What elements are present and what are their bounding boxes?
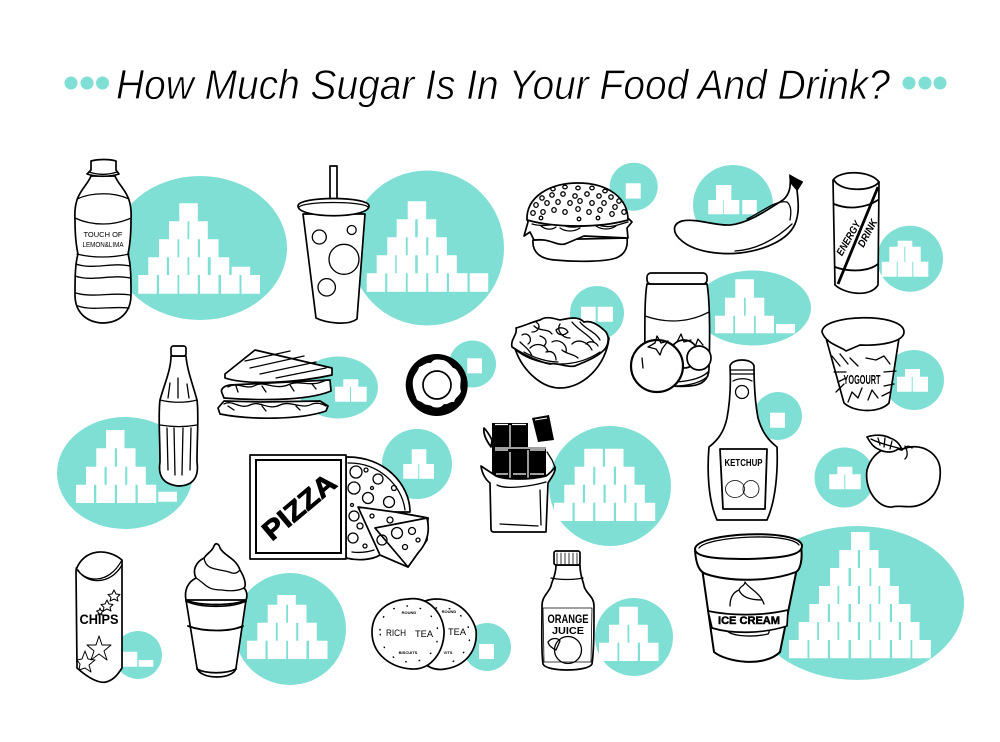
icon: banana — [674, 174, 803, 254]
icon: sandwich — [218, 350, 332, 418]
item: fizzy drink — [298, 166, 504, 326]
icon: apple — [867, 435, 940, 507]
tomatoes — [670, 340, 698, 368]
bottle label text: KETCHUP — [724, 457, 762, 469]
teal ellipse — [750, 526, 964, 680]
teal ellipse — [298, 356, 378, 418]
sugar cube — [479, 644, 494, 659]
teal circle — [693, 165, 773, 245]
sesame seeds — [531, 185, 626, 221]
item: energy drink — [833, 173, 943, 293]
sugar cubes: sundae — [247, 595, 328, 659]
bottle label: TOUCH OF — [83, 230, 123, 239]
icon: burger — [524, 183, 632, 261]
sugar cubes: jar — [715, 279, 795, 333]
pizza box — [250, 455, 346, 559]
icon: water bottle — [75, 160, 131, 323]
icon: sundae cup — [185, 544, 247, 677]
teal ellipse — [549, 426, 671, 546]
item: salad — [512, 286, 624, 388]
icon: pizza and box — [250, 455, 428, 567]
item: cola bottle — [57, 346, 198, 529]
icon: pizza and box: PIZZA — [256, 467, 342, 546]
icon: biscuits — [372, 599, 476, 670]
title: How Much Sugar Is In Your Food And Drink? — [116, 61, 891, 108]
icon: energy drink can — [833, 173, 881, 293]
tub text: ICE CREAM — [718, 615, 780, 627]
item: doughnut — [406, 340, 496, 416]
teal circle — [610, 163, 658, 211]
icon: energy drink can: DRINK — [856, 216, 881, 249]
teal circle — [595, 598, 673, 676]
item: ice cream tub — [695, 526, 964, 680]
icon: biscuits: TEA — [415, 629, 433, 639]
item: chips — [76, 552, 162, 682]
icon: fizzy drink cup — [298, 166, 369, 323]
item: orange juice — [542, 551, 673, 676]
sugar cubes: cola — [76, 430, 177, 503]
can text: ENERGY — [834, 218, 864, 258]
title dots right — [902, 76, 946, 90]
sugar cubes: fizzy drink — [367, 201, 488, 292]
sugar cubes: sandwich — [335, 379, 367, 402]
icon: biscuits: TEA — [448, 627, 466, 637]
icon: doughnut — [406, 354, 468, 416]
sugar cube — [626, 183, 641, 199]
icon: salad bowl — [512, 318, 609, 388]
stars — [77, 590, 120, 672]
item: ice cream sundae — [185, 544, 346, 685]
teal circle — [570, 286, 624, 340]
teal circle — [463, 623, 511, 671]
icon: chocolate bar — [481, 415, 555, 532]
sugar cubes: energy drink — [882, 241, 928, 277]
sugar cubes: ice cream — [789, 532, 931, 658]
icon: juice bottle — [542, 551, 594, 670]
item: yogurt — [822, 318, 944, 410]
teal circle — [113, 176, 287, 320]
item: pizza — [250, 429, 452, 567]
teal ellipse — [57, 417, 193, 529]
teal circle — [877, 226, 943, 292]
sugar cubes: chocolate — [554, 449, 655, 521]
item: burger — [524, 163, 658, 261]
icon: cola bottle — [159, 346, 198, 486]
item: water bottle — [75, 160, 287, 323]
icon: jar with tomatoes — [631, 273, 711, 392]
teal circle — [350, 170, 504, 326]
sugar cubes: chips — [123, 652, 153, 667]
teal circle — [814, 448, 874, 508]
item: tomato jar — [631, 270, 811, 392]
teal circle — [382, 429, 452, 499]
teal circle — [234, 573, 346, 685]
tube text: CHIPS — [80, 611, 118, 627]
icon: biscuits: ROUND — [442, 609, 456, 614]
teal ellipse — [695, 270, 811, 346]
item: chocolate bar — [481, 415, 671, 546]
toppings — [348, 466, 396, 548]
icon: biscuits: ROUND — [402, 610, 416, 615]
item: apple — [814, 435, 940, 508]
bubbles — [312, 226, 359, 296]
item: rich tea biscuits — [372, 599, 511, 671]
biscuit text: RICH — [386, 628, 406, 638]
sugar cubes: pizza — [403, 449, 434, 479]
teal circle — [884, 350, 944, 410]
icon: biscuits: BISCUITS — [399, 650, 418, 655]
sugar cubes: salad — [581, 307, 613, 322]
item: ketchup — [708, 360, 802, 520]
bottle text: ORANGE — [548, 612, 588, 626]
sugar cubes: orange juice — [599, 607, 658, 661]
sugar cubes: water bottle — [138, 203, 260, 294]
icon: biscuits: VITS — [444, 650, 453, 655]
icon: juice bottle: JUICE — [552, 625, 584, 637]
sugar cube — [467, 358, 482, 373]
item: sandwich — [218, 350, 378, 418]
teal circle — [449, 340, 496, 388]
icon: water bottle: LEMON&LIMA — [82, 240, 124, 249]
sugar cubes: yogurt — [897, 369, 928, 392]
title dots left — [64, 76, 109, 90]
sugar cube — [770, 413, 785, 428]
pot text: YOGOURT — [844, 373, 881, 387]
title row — [64, 61, 946, 108]
teal circle — [114, 631, 162, 679]
icon: ice cream tub — [695, 534, 802, 662]
icon: ketchup bottle — [708, 360, 777, 520]
sugar cubes: apple — [829, 467, 861, 489]
item: banana — [674, 165, 803, 254]
sugar cubes: banana — [708, 185, 757, 214]
teal circle — [754, 392, 802, 440]
